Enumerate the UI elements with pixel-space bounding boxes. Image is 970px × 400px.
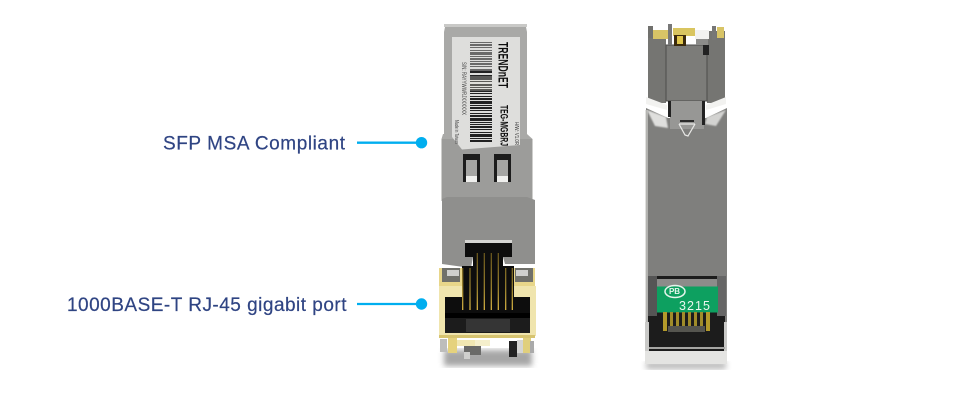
green circuit board: PB: [669, 287, 680, 296]
module shadow: [444, 350, 532, 366]
contact pins: [463, 253, 512, 310]
product label sticker: [452, 37, 520, 150]
module rear body: [442, 24, 532, 201]
metal cover: [442, 197, 535, 268]
serial number: S/N: RAYYWWRJXXXXXX: [460, 62, 467, 115]
label: 1000BASE-T RJ-45 gigabit port: 1000BASE-T RJ-45 gigabit port: [67, 295, 347, 316]
gold edge fingers: [663, 312, 710, 332]
upper body: [648, 31, 725, 103]
latch tab: [668, 101, 705, 136]
bottom feet: [439, 335, 535, 359]
cage opening: [648, 276, 726, 351]
model number: TEG-MGBRJ: [498, 105, 510, 146]
barcode: [470, 42, 492, 143]
module shadow: [646, 362, 726, 369]
hardware version: H/W: V1.0R: [513, 122, 519, 145]
latch windows: [463, 154, 511, 182]
white spring strap: [646, 97, 726, 128]
green circuit board: [657, 286, 718, 313]
country of origin: Made in Taiwan: [453, 120, 459, 144]
label: SFP MSA Compliant: SFP MSA Compliant: [163, 133, 346, 154]
gold port housing: [439, 268, 536, 336]
product: SFP module, top view with RJ-45 port: [439, 24, 536, 366]
label: SFP MSA Compliant: [163, 133, 427, 154]
RJ-45 jack opening: [445, 243, 530, 333]
white bottom lip: [645, 322, 727, 364]
brand name: TRENDnET: [496, 42, 510, 88]
board code: 3215: [679, 299, 710, 313]
gold rear connector: [648, 24, 724, 46]
lower body: [646, 108, 727, 326]
product: SFP module, bottom view with circuit board: [645, 24, 727, 369]
